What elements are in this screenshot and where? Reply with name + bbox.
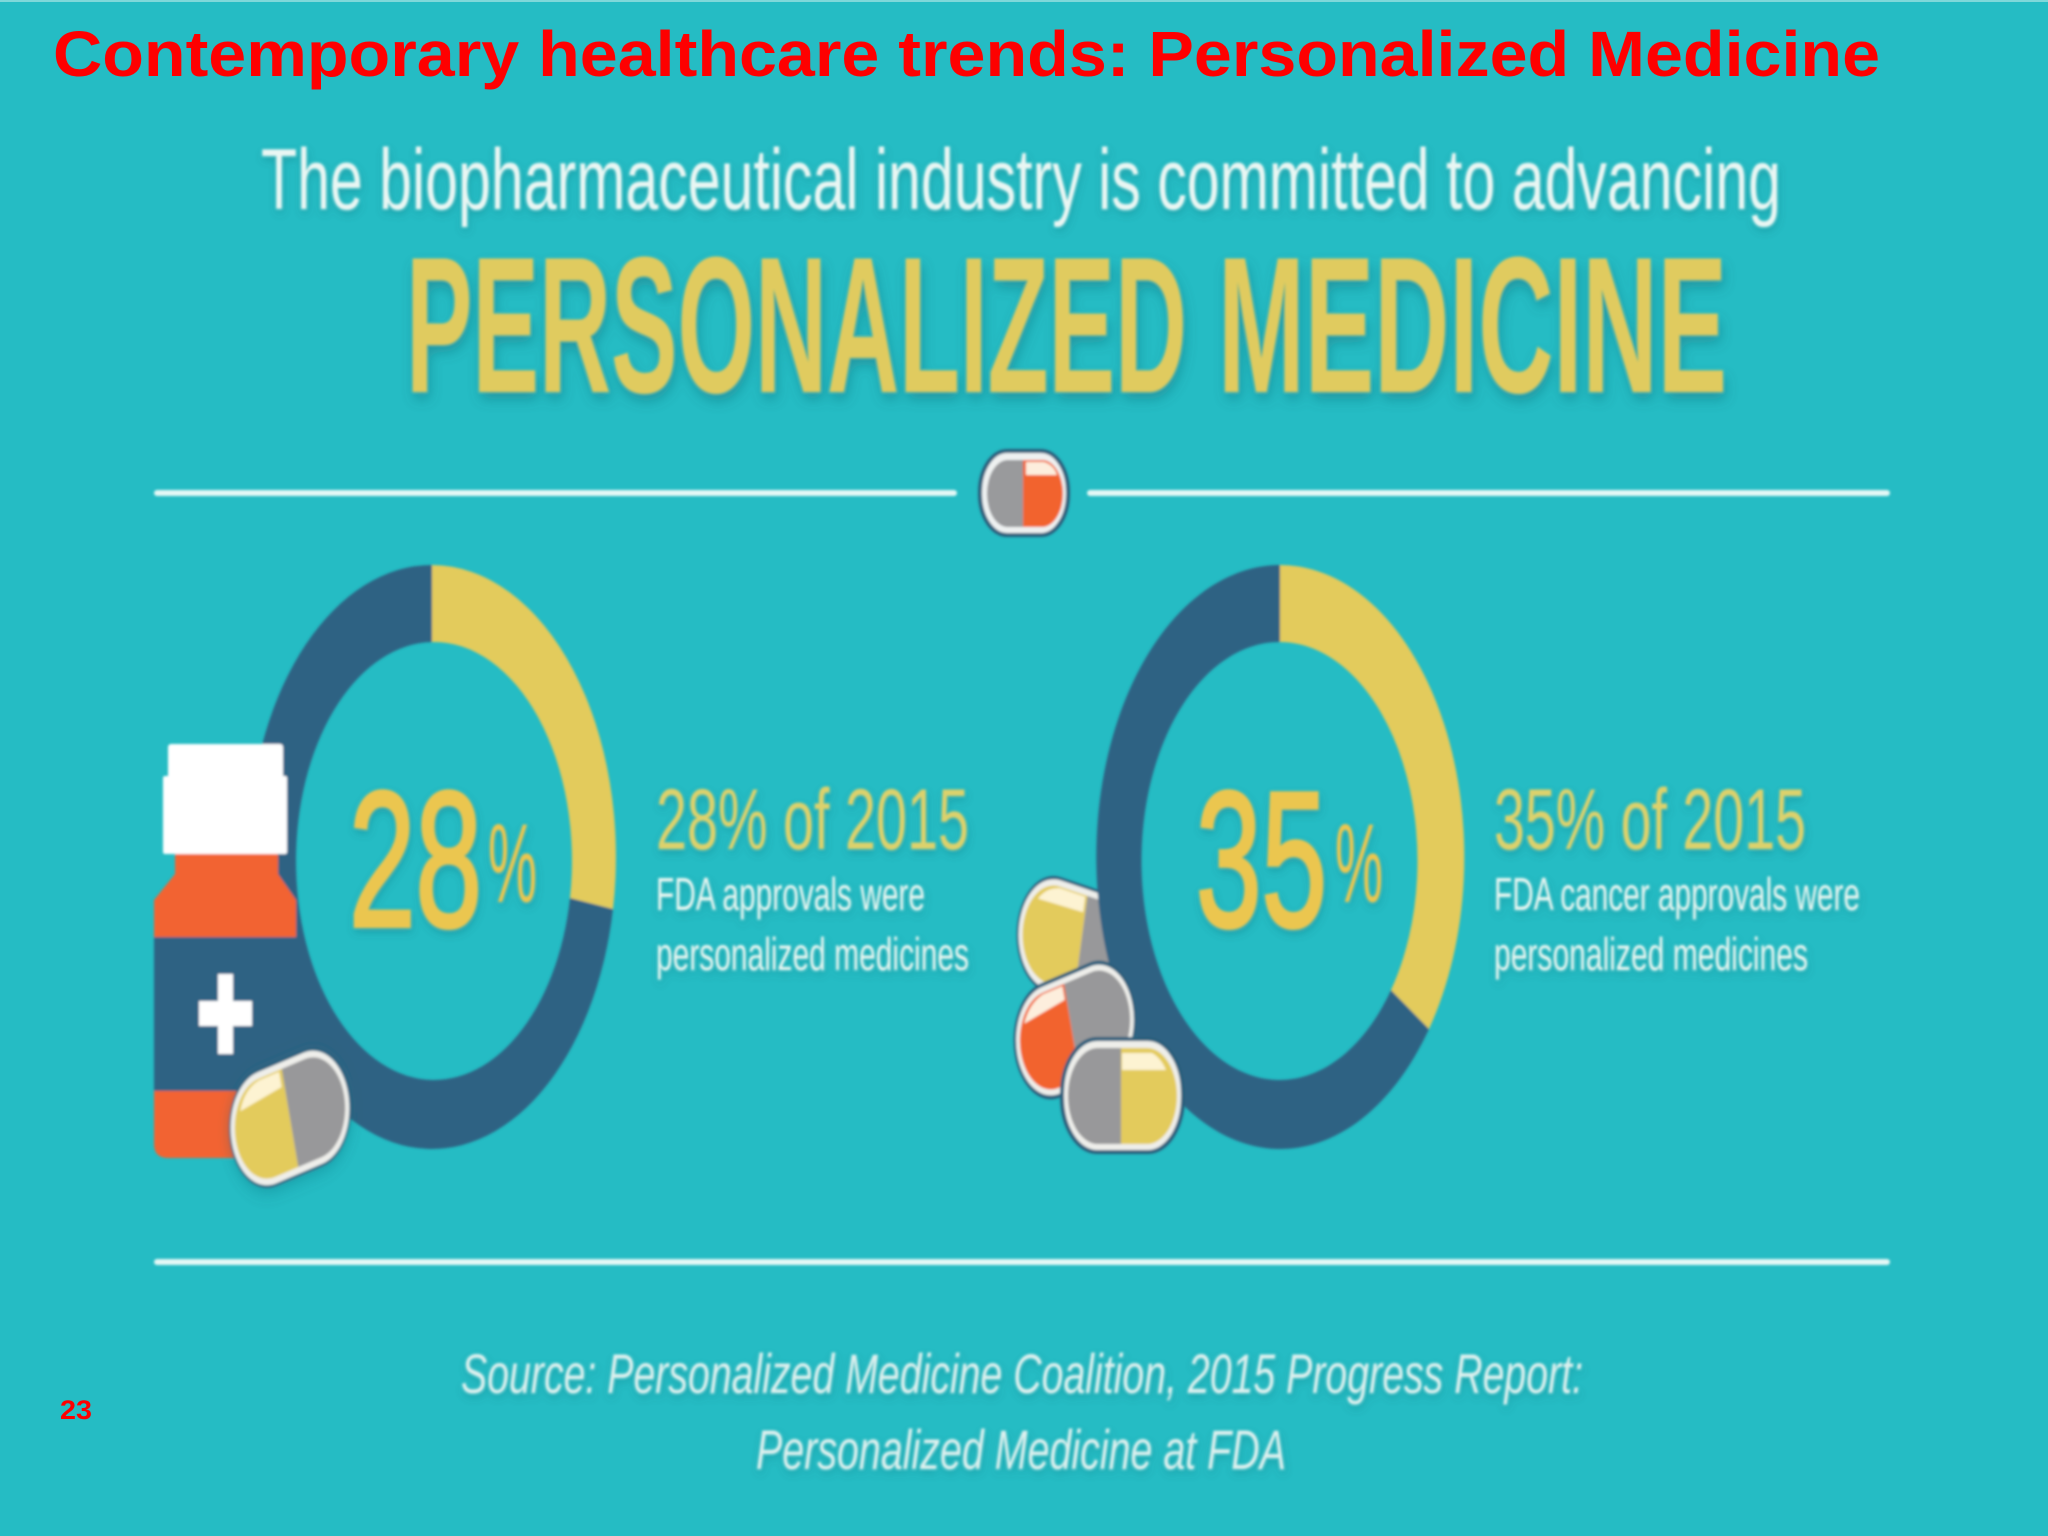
icon: medicine bottle xyxy=(154,744,296,1158)
donut chart: 35% xyxy=(1096,565,1464,1149)
stat text: 35 percent xyxy=(1494,772,1860,980)
panel: 28 percent: % xyxy=(488,801,537,926)
stat text: 28 percent: personalized medicines xyxy=(656,928,969,980)
slide title: Contemporary healthcare trends: Personalized Medicine xyxy=(53,18,1880,90)
source citation xyxy=(461,1342,1583,1481)
stat text: 35 percent: FDA cancer approvals were xyxy=(1494,868,1860,920)
icon: yellow and grey pill xyxy=(222,1036,359,1203)
source citation: Source: Personalized Medicine Coalition, 2015 Progress Report: xyxy=(461,1342,1583,1405)
icon: divider pill xyxy=(980,451,1068,535)
panel: 35 percent: % xyxy=(1335,801,1383,926)
top divider with pill xyxy=(154,451,1890,535)
stat text: 35 percent: 35% of 2015 xyxy=(1494,772,1806,868)
stat text: 28 percent xyxy=(656,772,969,980)
icon: yellow pill behind ring xyxy=(1011,867,1145,1019)
stat text: 35 percent: personalized medicines xyxy=(1494,928,1808,980)
stat text: 28 percent: FDA approvals were xyxy=(656,868,925,920)
donut chart: 28% xyxy=(248,565,616,1149)
panel: 28 percent xyxy=(154,565,969,1203)
page number: 23 xyxy=(60,1395,92,1425)
source citation: Personalized Medicine at FDA xyxy=(756,1418,1286,1481)
icon: plus xyxy=(199,974,252,1054)
icon: grey and yellow pill xyxy=(1062,1039,1183,1152)
icon: orange and grey pill xyxy=(1007,950,1143,1110)
big number 35%: 35 xyxy=(1196,751,1327,967)
stat text: 28 percent: 28% of 2015 xyxy=(656,772,969,868)
big number 28%: 28 xyxy=(349,751,482,967)
main heading: PERSONALIZED xyxy=(406,217,1187,434)
panel: 35 percent xyxy=(1007,565,1860,1152)
